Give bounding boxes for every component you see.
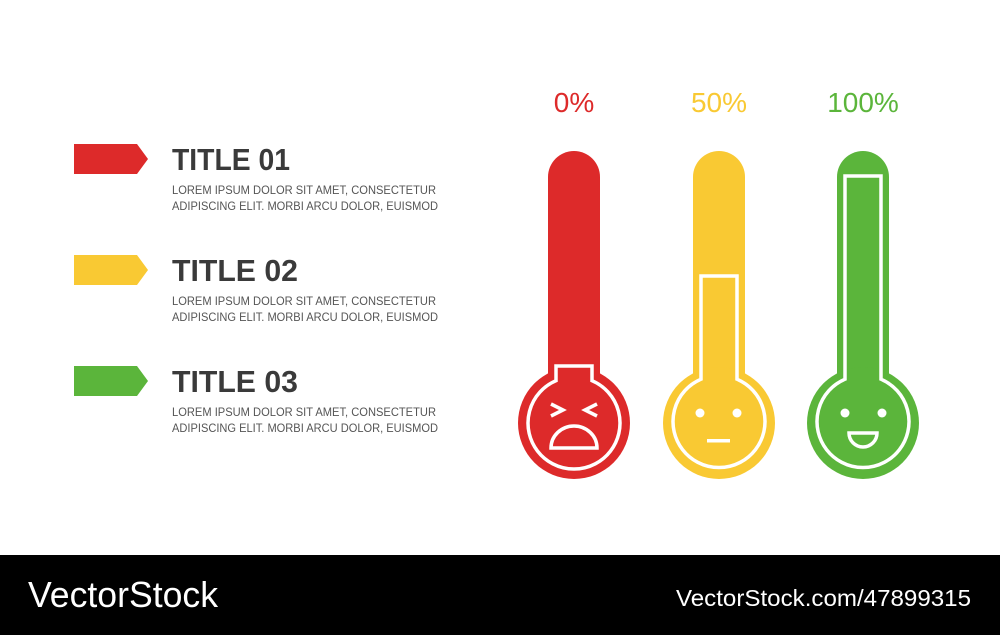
thermometer: green [807,151,919,479]
description 2: LOREM IPSUM DOLOR SIT AMET, CONSECTETUR [172,296,436,308]
label 100%: 100% [827,87,899,118]
face: happy [840,408,886,447]
description 1: LOREM IPSUM DOLOR SIT AMET, CONSECTETUR [172,185,436,197]
footer url: VectorStock.com/47899315 [676,585,971,611]
item 1 [74,142,438,213]
title 02: TITLE 02 [172,253,298,288]
item 3 [74,364,438,435]
item 2 [74,253,438,324]
face: neutral [696,408,742,442]
footer bar [0,555,1000,635]
description 2: ADIPISCING ELIT. MORBI ARCU DOLOR, EUISMOD [172,312,438,324]
arrow: yellow [74,255,148,285]
thermometer: red [518,151,630,479]
arrow: green [74,366,148,396]
thermometer: yellow [663,151,775,479]
description 3: ADIPISCING ELIT. MORBI ARCU DOLOR, EUISMOD [172,423,438,435]
title 03: TITLE 03 [172,364,298,399]
footer logo: VectorStock [28,574,219,615]
label 0%: 0% [554,87,594,118]
label 50%: 50% [691,87,747,118]
description 3: LOREM IPSUM DOLOR SIT AMET, CONSECTETUR [172,407,436,419]
description 1: ADIPISCING ELIT. MORBI ARCU DOLOR, EUISMOD [172,201,438,213]
arrow: red [74,144,148,174]
face: upset [551,404,597,448]
title 01: TITLE 01 [172,142,290,177]
